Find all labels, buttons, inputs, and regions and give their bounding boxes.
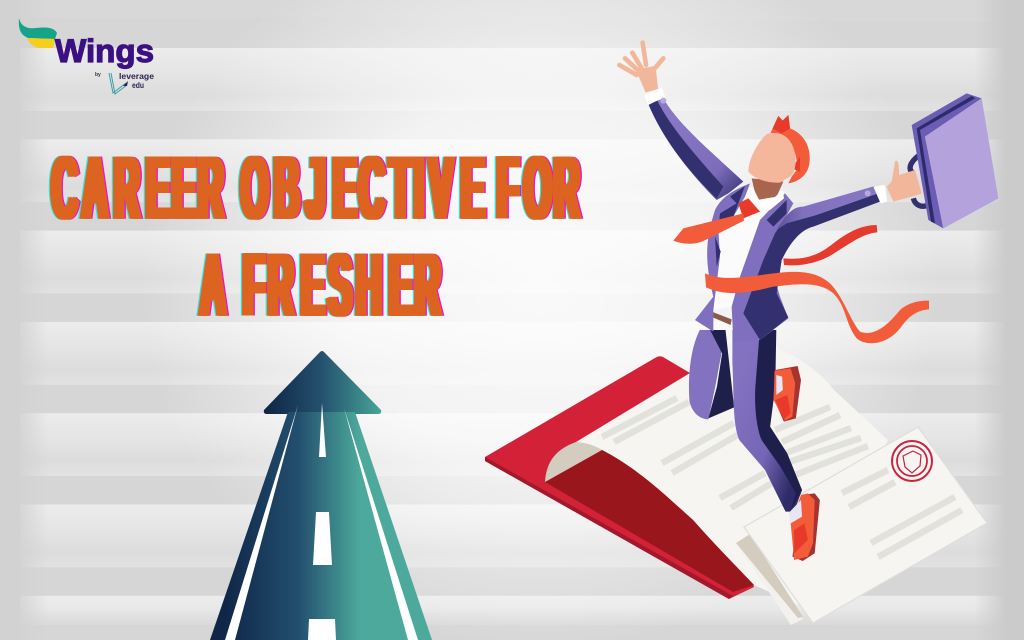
logo wordmark: Wings — [55, 33, 154, 69]
title line 1: CAREER OBJECTIVE FOR — [49, 139, 576, 238]
upper body — [619, 43, 998, 343]
road shaft — [210, 412, 432, 640]
logo byline: by — [95, 72, 101, 78]
title line 2: A FRESHER — [202, 236, 442, 335]
bent leg — [689, 330, 734, 419]
title line 1: CAREER OBJECTIVE FOR — [48, 139, 575, 238]
page sheet — [576, 347, 888, 610]
page curl — [545, 442, 602, 482]
briefcase face — [925, 98, 998, 228]
lower shoe — [789, 493, 820, 561]
briefcase — [910, 93, 998, 228]
beige sheet behind document — [736, 534, 803, 618]
neck — [752, 178, 783, 200]
hair — [770, 115, 810, 183]
road centre dashes — [308, 403, 336, 640]
tie — [673, 198, 760, 244]
right arm — [763, 185, 887, 260]
title line 1: CAREER OBJECTIVE FOR — [56, 139, 584, 238]
page text lines — [602, 398, 868, 508]
page under document — [736, 543, 803, 625]
title line 1: CAREER OBJECTIVE FOR — [53, 139, 581, 238]
book cover — [485, 356, 754, 599]
road left edge line — [225, 405, 298, 640]
document sheet — [744, 427, 987, 623]
title line 1: CAREER OBJECTIVE FOR — [52, 139, 579, 238]
title line 2: A FRESHER — [200, 236, 440, 335]
legs and shoes — [689, 330, 820, 561]
upper shoe — [774, 366, 801, 422]
face — [748, 133, 796, 183]
title line 2: A FRESHER — [197, 236, 437, 335]
document text lines — [842, 470, 962, 557]
ribbon front — [705, 272, 929, 343]
title line 1: CAREER OBJECTIVE FOR — [55, 139, 582, 238]
standing leg — [732, 330, 802, 512]
title line 2: A FRESHER — [203, 236, 443, 335]
title line 2: A FRESHER — [196, 236, 436, 335]
icon: certificate seal — [892, 441, 932, 481]
businessman jumping — [619, 43, 998, 561]
logo: Wings by leverage edu — [19, 18, 155, 94]
ribbon back — [783, 225, 877, 265]
briefcase stripe — [917, 96, 975, 223]
belt — [711, 312, 732, 325]
briefcase handle — [910, 155, 928, 206]
road arrow — [210, 351, 432, 640]
briefcase top and side — [912, 93, 982, 228]
logo subtext leverage: leverage — [119, 72, 155, 81]
icon: yellow wing — [27, 38, 55, 48]
collar — [753, 188, 784, 210]
title — [48, 139, 584, 335]
road right edge line — [344, 408, 418, 640]
title line 1: CAREER OBJECTIVE FOR — [50, 139, 578, 238]
raised arm — [644, 87, 743, 200]
title line 2: A FRESHER — [204, 236, 445, 335]
title line 2: A FRESHER — [199, 236, 439, 335]
shirt — [712, 187, 785, 310]
briefcase clips — [913, 137, 940, 217]
raised hand — [619, 43, 663, 92]
hand holding briefcase — [887, 161, 922, 202]
icon: teal wing — [19, 18, 57, 39]
jacket left panel — [695, 183, 750, 332]
arrow head — [264, 351, 381, 414]
icon: leverage V mark — [109, 73, 127, 94]
book inside shadow — [545, 450, 754, 592]
open red book with pages — [485, 347, 987, 625]
icon: small rocket — [123, 81, 128, 86]
jacket right panel — [732, 193, 797, 342]
logo subtext edu: edu — [132, 81, 144, 90]
